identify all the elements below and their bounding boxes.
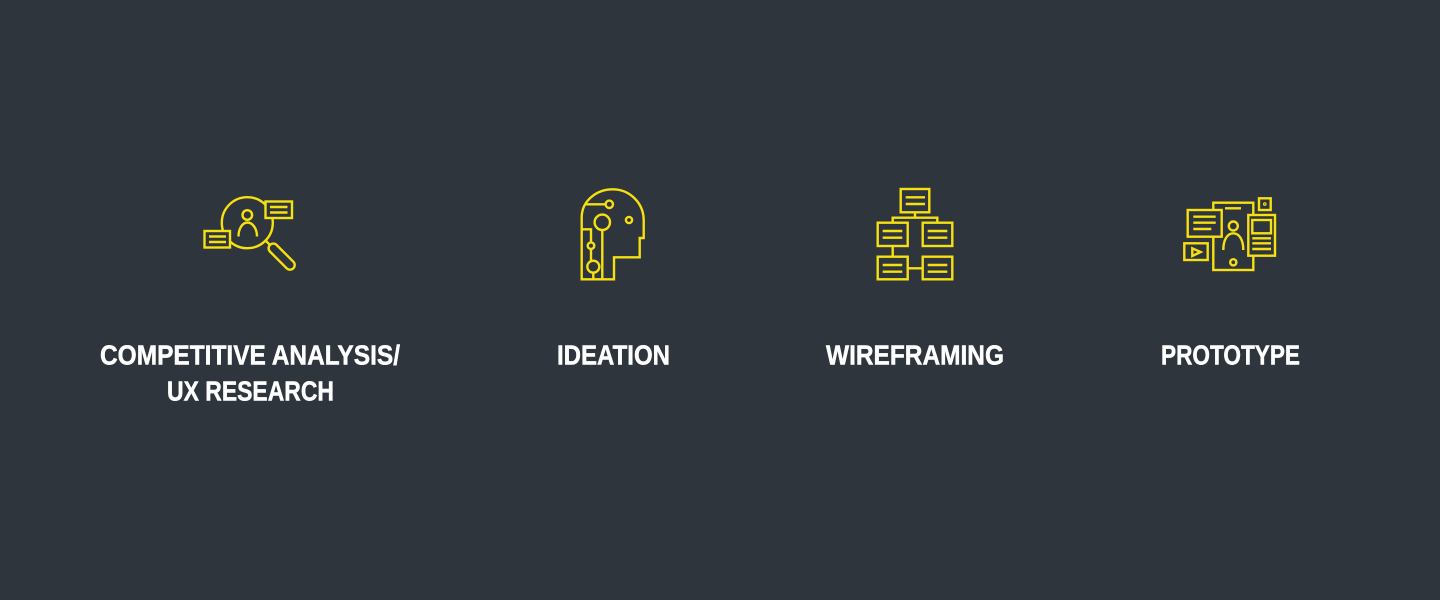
icon: head with circuit: [582, 189, 644, 279]
icon: prototype screens: [1184, 198, 1275, 270]
heading: ideation: IDEATION: [557, 340, 670, 370]
icon: wireframe flow chart: [878, 189, 952, 279]
icon: magnifying glass with user: [204, 197, 292, 265]
heading: wireframing: WIREFRAMING: [826, 340, 1004, 370]
heading: competitive analysis / ux research: UX RESEARCH: [167, 376, 334, 406]
heading: prototype: PROTOTYPE: [1161, 340, 1300, 370]
heading: competitive analysis / ux research: COMPETITIVE ANALYSIS/: [100, 340, 400, 370]
heading: competitive analysis / ux research: [100, 340, 400, 406]
